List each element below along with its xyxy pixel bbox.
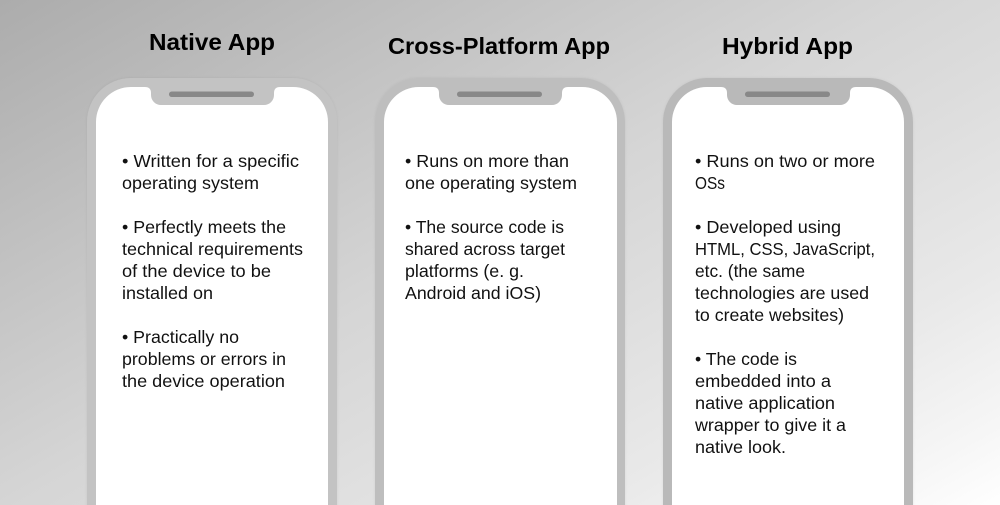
text block: cross-platform app points: shared across target [405, 239, 565, 259]
text block: native app points: technical requirements [122, 239, 303, 259]
text block: native app points [122, 151, 303, 391]
text block: native app points: • Perfectly meets the [122, 217, 286, 237]
text block: native app points: the device operation [122, 371, 285, 391]
text block: native app points: operating system [122, 173, 259, 193]
text block: cross-platform app points: platforms (e. g. [405, 261, 524, 281]
text block: hybrid app points [694, 151, 875, 457]
panel: hybrid app [663, 33, 913, 505]
heading: cross-platform app: Cross-Platform App [388, 33, 610, 59]
text block: cross-platform app points: Android and iOS) [405, 283, 541, 303]
text block: hybrid app points: OSs [695, 173, 725, 193]
text block: hybrid app points: native application [695, 393, 835, 413]
text block: cross-platform app points: one operating system [405, 173, 577, 193]
text block: hybrid app points: wrapper to give it a [694, 415, 846, 435]
text block: hybrid app points: to create websites) [695, 305, 844, 325]
text block: hybrid app points: • Developed using [695, 217, 841, 237]
text block: native app points: of the device to be [122, 261, 271, 281]
phone frame: cross-platform app [375, 78, 625, 505]
heading: hybrid app: Hybrid App [722, 33, 853, 59]
text block: hybrid app points: • Runs on two or more [695, 151, 875, 171]
panel: native app [87, 29, 337, 505]
text block: native app points: • Written for a specific [122, 151, 299, 171]
text block: hybrid app points: etc. (the same [695, 261, 805, 281]
text block: hybrid app points: native look. [695, 437, 786, 457]
heading: native app: Native App [149, 29, 275, 55]
panel: cross-platform app [375, 33, 625, 505]
text block: cross-platform app points [405, 151, 577, 303]
text block: hybrid app points: HTML, CSS, JavaScript, [695, 239, 875, 259]
text block: hybrid app points: • The code is [695, 349, 797, 369]
phone frame: native app [87, 78, 337, 505]
text block: cross-platform app points: • The source code is [405, 217, 564, 237]
text block: cross-platform app points: • Runs on more than [405, 151, 569, 171]
text block: hybrid app points: technologies are used [695, 283, 869, 303]
phone frame: hybrid app [663, 78, 913, 505]
text block: native app points: installed on [122, 283, 213, 303]
text block: native app points: problems or errors in [122, 349, 286, 369]
text block: native app points: • Practically no [122, 327, 239, 347]
text block: hybrid app points: embedded into a [695, 371, 831, 391]
